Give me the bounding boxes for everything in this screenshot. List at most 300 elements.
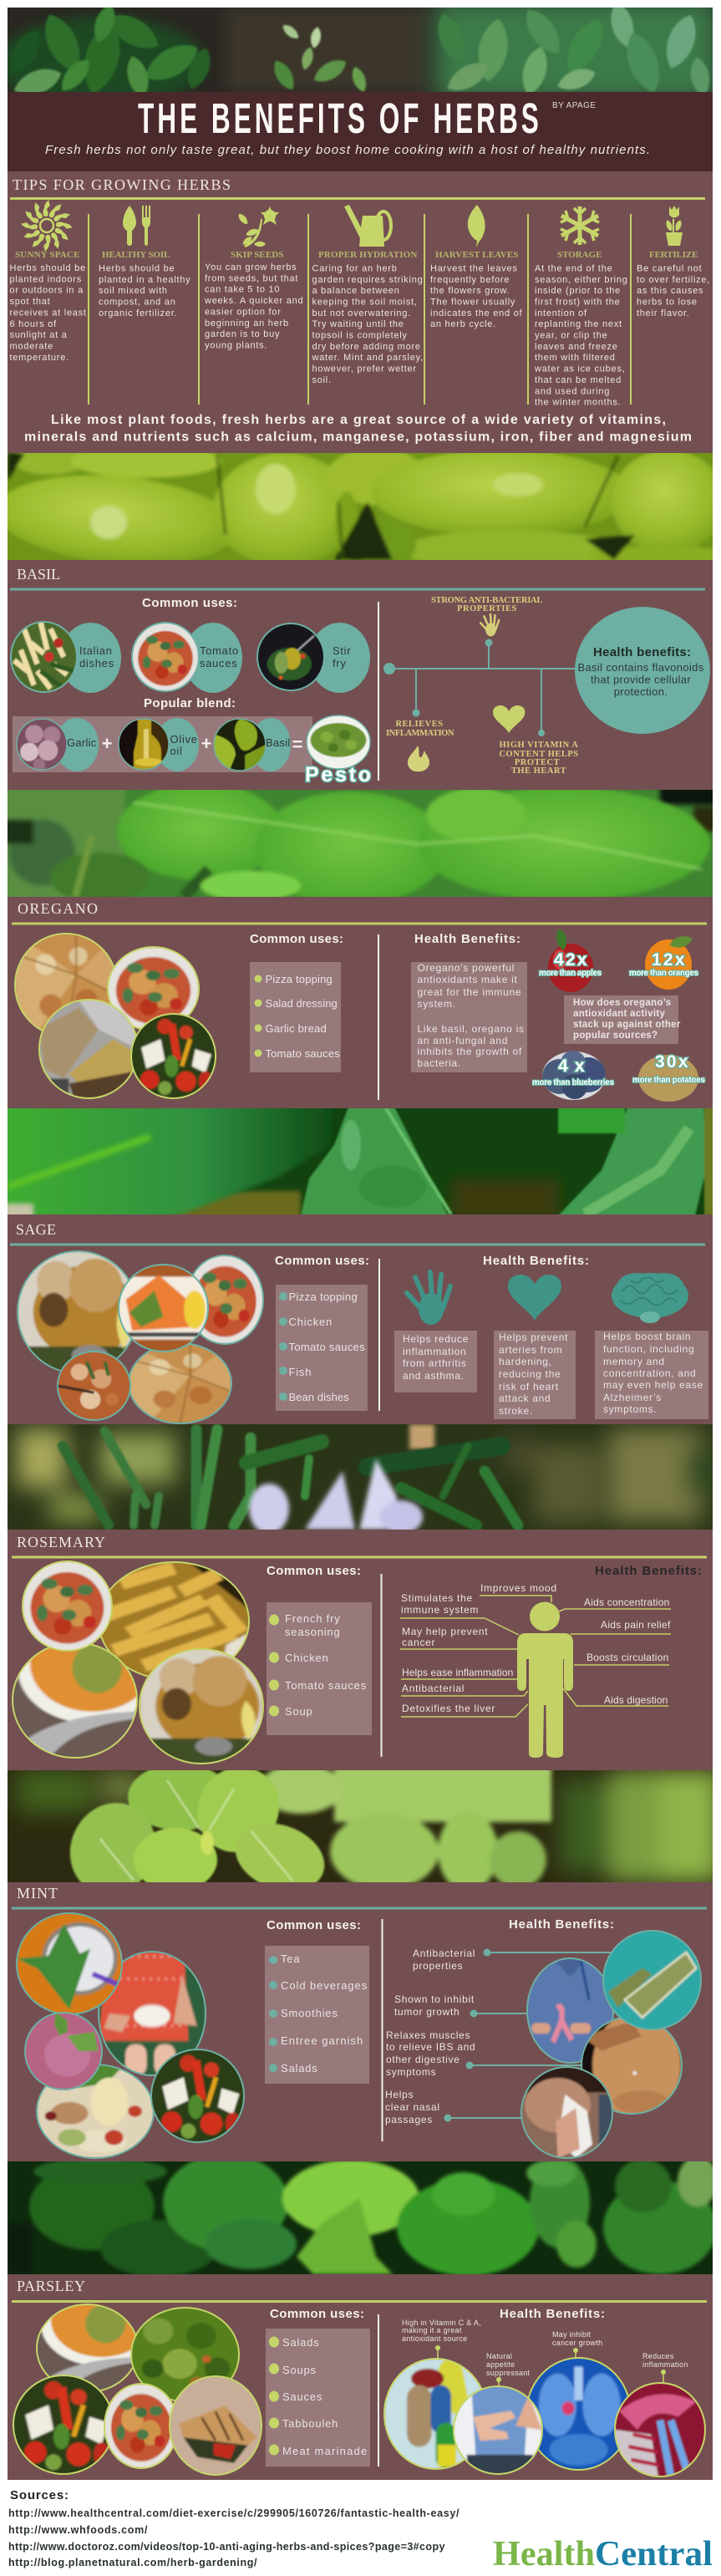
common uses list: Fish (289, 1366, 312, 1378)
benefits text box: bacteria. (418, 1057, 461, 1069)
benefit: arteries (494, 1275, 576, 1419)
icon: sun (21, 200, 73, 252)
photo: roast chicken (18, 1251, 138, 1373)
stat: apples (539, 928, 602, 992)
logo: HealthCentral: Central (595, 2535, 713, 2573)
tip 3: skip seeds: can take 5 to 10 (205, 285, 280, 295)
common uses list: Tea (281, 1952, 300, 1965)
photo: sneezing (521, 2067, 612, 2158)
benefit: arteries: attack and (499, 1392, 551, 1404)
photo: tomato dish (186, 1255, 263, 1344)
stat: apples: 42x (554, 950, 587, 970)
diagram: human body benefits: Boosts circulation (586, 1652, 669, 1663)
common uses list (276, 1285, 368, 1411)
benefit: brain: function, including (603, 1343, 694, 1355)
heading: basil: BASIL (17, 566, 61, 583)
benefit labels: High in Vitamin C & A, (402, 2319, 481, 2327)
callout: health benefits: that provide cellular (591, 674, 691, 685)
tip 6: storage: season, either bring (535, 275, 628, 285)
tip 4: proper hydration: keeping the soil moist, (312, 297, 418, 307)
tip 4: proper hydration: Caring for an herb (312, 263, 398, 273)
callout: health benefits: Basil contains flavonoids (577, 661, 704, 674)
stat: potatoes: 30x (655, 1052, 688, 1072)
benefit: brain: symptoms. (603, 1403, 657, 1415)
benefit labels: Relaxes muscles (386, 2029, 470, 2041)
benefits text box: Oregano’s powerful (418, 962, 515, 974)
subtitle: Fresh herbs not only taste great, but they boost home cooking with a host of healthy nutrients. (45, 143, 650, 157)
photo: roast chicken (140, 1649, 263, 1764)
photo: vitamin pills (384, 2356, 487, 2469)
heading: sage: SAGE (16, 1221, 57, 1238)
food photo collage (17, 1913, 244, 2158)
tip 7: fertilize: to over fertilize, (637, 275, 710, 285)
common uses list: Tomato sauces (289, 1341, 366, 1353)
tip 4: proper hydration: a balance between (312, 286, 400, 296)
tip 5: harvest leaves: Harvest the leaves (430, 263, 518, 273)
common uses list: Tomato sauces (266, 1047, 341, 1060)
photo: soup (37, 2282, 158, 2392)
benefit: arteries: Helps prevent (499, 1331, 568, 1343)
benefit labels: Antibacterial (413, 1947, 475, 1959)
blend: olive oil (119, 718, 199, 771)
health benefits heading: Health Benefits: (509, 1917, 615, 1932)
icon: person (517, 1601, 573, 1758)
benefit labels: tumor growth (394, 2006, 460, 2018)
heading: mint: MINT (17, 1885, 58, 1901)
benefits text box: great for the immune (418, 986, 521, 998)
blend: garlic: Garlic (67, 736, 97, 749)
tip 1: sunny space: temperature. (10, 353, 69, 363)
logo: HealthCentral: Health (493, 2535, 595, 2573)
common uses list: Pizza topping (289, 1291, 358, 1303)
health benefits heading: Health Benefits: (500, 2307, 606, 2321)
panel: sage (8, 1214, 713, 1424)
tip 3: skip seeds: SKIP SEEDS (231, 250, 284, 260)
parsley photo (8, 2161, 713, 2274)
use: tomato sauces (132, 623, 242, 693)
sources: http://blog.planetnatural.com/herb-gardening/ (8, 2557, 257, 2568)
tip 2: healthy soil: planted in a healthy (99, 275, 190, 285)
panel: rosemary (8, 1530, 713, 1770)
blend: olive oil: Olive (170, 733, 198, 746)
common uses heading: Common uses: (142, 596, 238, 610)
pesto blend strip (13, 716, 312, 772)
heading: parsley: PARSLEY (17, 2278, 86, 2294)
sources: Sources: (10, 2488, 69, 2502)
photo: garlic bread (39, 1000, 138, 1098)
common uses list: Entree garnish (281, 2034, 363, 2047)
use: Italian dishes: dishes (79, 657, 114, 669)
callout: inflammation: RELIEVES (395, 720, 444, 729)
blend: olive oil: oil (170, 745, 183, 757)
icon: trowel and fork (123, 206, 150, 246)
benefit labels: Helps (385, 2089, 414, 2100)
callout: anti-bacterial: PROPERTIES (457, 604, 517, 613)
header band (8, 92, 713, 171)
photo: soup (13, 1612, 162, 1758)
panel: tips for growing herbs (8, 171, 713, 453)
photo: tomato dish (23, 1561, 112, 1651)
benefit: arteries: hardening, (499, 1356, 552, 1367)
question box: How does oregano’s (573, 998, 671, 1008)
use: stir fry: Stir (333, 644, 351, 657)
common uses list: Chicken (289, 1316, 333, 1328)
byline: BY APAGE (552, 101, 596, 110)
tip 6: storage: that can be melted (535, 375, 622, 385)
photo collage: benefits (384, 2356, 705, 2477)
tip 4: proper hydration: water. Mint and parsley, (311, 353, 424, 363)
benefits text box: antioxidants make it (418, 974, 518, 985)
benefit labels: appetite (486, 2360, 515, 2369)
callout: inflammation: INFLAMMATION (386, 729, 454, 738)
benefit: arteries: stroke. (499, 1405, 533, 1417)
icon: watering can (344, 205, 391, 247)
blend: basil (214, 718, 291, 771)
common uses list: Tabbouleh (282, 2417, 338, 2430)
stat: potatoes: more than potatoes (632, 1076, 705, 1085)
callout: heart: HIGH VITAMIN A (500, 741, 578, 750)
photo: pizza (15, 934, 117, 1036)
icon: potted flower (665, 206, 683, 246)
food photo collage (18, 1251, 263, 1423)
tip 7: fertilize: as this causes (637, 286, 703, 296)
stat: oranges: more than oranges (629, 969, 698, 978)
tip 4: proper hydration: but not overwatering. (312, 308, 411, 318)
sage leaf photo (8, 1108, 713, 1214)
tip 4: proper hydration: however, prefer wetter (312, 364, 417, 374)
photo: shoulder anatomy (615, 2383, 705, 2477)
common uses heading: Common uses: (270, 2307, 365, 2321)
tree diagram lines (383, 639, 575, 736)
tip 4: proper hydration: garden requires striking (312, 275, 423, 285)
benefit labels: Natural (486, 2352, 512, 2360)
callout: health benefits: Health benefits: (593, 645, 691, 659)
tip 3: skip seeds: beginning an herb (205, 318, 289, 328)
tip 5: harvest leaves: The flower usually (430, 297, 515, 307)
callout: heart: PROTECT (515, 758, 560, 767)
health benefits heading: Health Benefits: (595, 1564, 702, 1578)
common uses list: Smoothies (281, 2007, 338, 2019)
callout: anti-bacterial: STRONG ANTI-BACTERIAL (431, 596, 543, 605)
tip 7: fertilize (637, 250, 710, 318)
photo collage: health conditions (521, 1931, 701, 2158)
tip 5: harvest leaves: the flowers grow. (430, 286, 510, 296)
oregano leaf photo (8, 790, 713, 897)
connector lines (444, 1949, 611, 2121)
health benefits heading: Health Benefits: (483, 1254, 590, 1268)
benefit labels: cancer growth (552, 2339, 602, 2347)
benefit labels: antioxidant source (402, 2334, 467, 2343)
benefit: inflammation (394, 1272, 477, 1392)
tip 4: proper hydration (311, 250, 424, 385)
common uses list: Cold beverages (281, 1979, 368, 1992)
callout: health benefits (575, 607, 710, 734)
connector dots (435, 2345, 666, 2388)
photo: tomato dish (104, 2384, 178, 2468)
benefit: inflammation: inflammation (403, 1346, 466, 1357)
photo: nurse with ribbon (527, 1958, 613, 2063)
popular blend heading: Popular blend: (144, 696, 236, 710)
tip 4: proper hydration: Try waiting until the (312, 319, 404, 329)
callout: heart (493, 705, 579, 776)
common uses heading: Common uses: (250, 932, 344, 946)
icon: leaf (468, 205, 485, 247)
diagram: human body benefits: Improves mood (480, 1582, 557, 1594)
benefit: inflammation: and asthma. (403, 1370, 465, 1382)
plus: + (102, 733, 112, 754)
photo: vegetable salad (151, 2049, 244, 2142)
panel: parsley (8, 2274, 713, 2480)
benefit: inflammation: Helps reduce (403, 1333, 469, 1345)
diagram: human body benefits: Stimulates the (401, 1592, 473, 1604)
nutrient statement: Like most plant foods, fresh herbs are a great source of a wide variety of vitamins, (51, 413, 666, 427)
photo: tabbouleh (131, 2308, 239, 2401)
tip 1: sunny space (10, 250, 87, 363)
photo: stomach (454, 2386, 542, 2474)
benefit: arteries: arteries from (499, 1344, 562, 1356)
pesto result (305, 715, 371, 787)
tip 3: skip seeds: young plants. (205, 340, 267, 350)
benefit: brain: Helps boost brain (603, 1331, 691, 1342)
tip 6: storage: water as ice cubes, (534, 364, 625, 374)
blend: garlic (17, 718, 99, 771)
photo: french fries (99, 1562, 249, 1680)
photo: pizza (129, 1343, 231, 1423)
benefit labels: other digestive (386, 2054, 460, 2065)
benefit labels (385, 1947, 475, 2125)
health benefits heading: Health Benefits: (414, 932, 521, 946)
common uses list: Meat marinade (282, 2445, 368, 2457)
common uses list: Salad dressing (266, 997, 338, 1010)
tip 3: skip seeds: from seeds, but that (205, 273, 298, 283)
diagram: human body benefits: Aids pain relief (601, 1619, 671, 1631)
common uses list (250, 962, 341, 1072)
callout: anti-bacterial (431, 596, 543, 636)
stat: blueberries: more than blueberries (532, 1078, 614, 1087)
common uses heading: Common uses: (267, 1918, 362, 1932)
tip 6: storage: At the end of the (535, 263, 612, 273)
common uses list: Soups (282, 2364, 317, 2376)
benefit labels: symptoms (386, 2066, 436, 2078)
common uses heading: Common uses: (267, 1564, 362, 1578)
common uses list: Salads (281, 2062, 318, 2075)
tip 1: sunny space: spot that (10, 297, 50, 307)
callout: health benefits: protection. (614, 685, 668, 698)
benefits text box (411, 962, 527, 1072)
tip 5: harvest leaves (430, 250, 523, 329)
photo: lungs (526, 2358, 631, 2470)
common uses list: Sauces (282, 2390, 322, 2403)
common uses list: Pizza topping (266, 973, 333, 985)
photo: woman with tea (99, 1952, 206, 2075)
logo: HealthCentral (493, 2535, 713, 2573)
benefits text box: Like basil, oregano is (418, 1023, 525, 1035)
diagram: human body benefits: cancer (402, 1637, 435, 1648)
tip 6: storage (534, 250, 628, 408)
photo: salad (13, 2375, 114, 2474)
panel: mint (8, 1882, 713, 2161)
tip 2: healthy soil: soil mixed with (99, 286, 168, 296)
common uses list: Garlic bread (266, 1022, 327, 1035)
photo: berry smoothie (25, 2013, 102, 2090)
tip 3: skip seeds: You can grow herbs (205, 262, 297, 272)
tip 6: storage: year, or clip the (535, 331, 607, 341)
diagram: human body benefits: Helps ease inflammation (402, 1667, 514, 1678)
tip 5: harvest leaves: an herb cycle. (430, 319, 496, 329)
tip 7: fertilize: FERTILIZE (649, 250, 698, 260)
benefit labels: inflammation (642, 2360, 688, 2369)
common uses list: Salads (282, 2336, 320, 2349)
benefit labels: May inhibit (552, 2330, 592, 2339)
tip 2: healthy soil (99, 250, 190, 318)
photo: mint drink (17, 1913, 122, 2014)
photo: tomato dish (108, 947, 199, 1031)
title: THE BENEFITS OF HERBS (138, 94, 539, 142)
common uses list (266, 2329, 370, 2467)
tip 4: proper hydration: soil. (312, 375, 332, 385)
hero photo: potted herbs (8, 8, 713, 92)
benefit labels: clear nasal (385, 2101, 440, 2113)
tip 5: harvest leaves: indicates the end of (430, 308, 523, 318)
tip 4: proper hydration: dry before adding more (312, 342, 421, 352)
common uses list: seasoning (285, 1626, 340, 1638)
benefits text box: inhibits the growth of (418, 1046, 522, 1057)
common uses list: Bean dishes (289, 1391, 349, 1403)
callout: heart: CONTENT HELPS (499, 750, 579, 759)
photo: bacteria (603, 1931, 701, 2029)
photo: salad (131, 1014, 216, 1098)
tip 3: skip seeds (204, 250, 303, 350)
benefit labels: Shown to inhibit (394, 1993, 475, 2005)
photo: salmon (119, 1265, 208, 1352)
diagram: human body benefits (400, 1582, 671, 1758)
blend: basil: Basil (266, 736, 291, 749)
tip 3: skip seeds: weeks. A quicker and (204, 296, 303, 306)
common uses list: Chicken (285, 1652, 329, 1664)
pesto result: Pesto (305, 763, 371, 787)
sources: http://www.doctoroz.com/videos/top-10-anti-aging-herbs-and-spices?page=3#copy (8, 2541, 445, 2553)
question box: antioxidant activity (573, 1009, 665, 1019)
photo: belly (581, 2012, 682, 2119)
tip 2: healthy soil: compost, and an (99, 297, 176, 307)
use: tomato sauces: Tomato (200, 644, 239, 657)
stat: apples: more than apples (539, 969, 602, 978)
tip 1: sunny space: Herbs should be (10, 263, 86, 273)
tip 6: storage: STORAGE (557, 250, 602, 260)
icon: snowflake (561, 206, 599, 245)
basil leaf photo (8, 453, 713, 560)
common uses list: French fry (285, 1612, 341, 1625)
tip 1: sunny space: SUNNY SPACE (15, 250, 80, 260)
photo: grilled salmon (170, 2376, 261, 2475)
use: stir fry: fry (333, 657, 347, 669)
benefit labels (402, 2319, 688, 2377)
diagram: human body benefits: Aids digestion (604, 1694, 668, 1706)
use: Italian dishes: Italian (79, 644, 113, 657)
heading: oregano: OREGANO (18, 900, 99, 917)
diagram: human body benefits: immune system (401, 1604, 479, 1616)
tip 6: storage: first frost) with the (535, 297, 621, 307)
benefit: brain: memory and (603, 1356, 665, 1367)
diagram: human body benefits: May help prevent (402, 1626, 488, 1637)
use: stir fry (257, 623, 370, 693)
stat: blueberries: 4x (558, 1056, 585, 1076)
benefit labels: suppressant (486, 2369, 531, 2377)
benefit: arteries: risk of heart (499, 1381, 559, 1392)
common uses list (267, 1602, 372, 1735)
common uses heading: Common uses: (275, 1254, 370, 1268)
nutrient statement (24, 413, 692, 445)
benefit labels: to relieve IBS and (386, 2041, 475, 2053)
photo: entree salad (37, 2064, 154, 2158)
tip 7: fertilize: their flavor. (637, 308, 690, 318)
benefits text box: an anti-fungal and (418, 1035, 508, 1046)
tip 3: skip seeds: garden is to buy (205, 329, 280, 339)
panel: oregano (8, 897, 713, 1108)
tip 1: sunny space: moderate (10, 341, 53, 351)
tip 4: proper hydration: PROPER HYDRATION (318, 250, 418, 260)
stat: potatoes (632, 1052, 705, 1102)
food photo collage (13, 2282, 261, 2475)
tip 3: skip seeds: easier option for (205, 307, 282, 317)
question box: stack up against other (573, 1020, 681, 1030)
icon: sprig with flower (236, 206, 279, 247)
tip 2: healthy soil: organic fertilizer. (99, 308, 177, 318)
tip 5: harvest leaves: frequently before (430, 275, 510, 285)
tip 1: sunny space: planted indoors (10, 274, 82, 284)
callout: inflammation (386, 720, 454, 771)
stat: oranges (629, 934, 698, 990)
tip 4: proper hydration: topsoil is completely (312, 331, 408, 341)
mint photo (8, 1770, 713, 1882)
benefit: brain: Alzheimer’s (603, 1392, 662, 1403)
benefit: brain (595, 1273, 708, 1419)
heading: tips: TIPS FOR GROWING HERBS (13, 176, 231, 193)
food photo collage (13, 1561, 263, 1764)
callout: heart: THE HEART (511, 766, 566, 776)
diagram: human body benefits: Aids concentration (584, 1596, 670, 1608)
tip 6: storage: leaves and freeze (535, 342, 618, 352)
benefit: inflammation: from arthritis (403, 1357, 466, 1369)
common uses list: Tomato sauces (285, 1679, 367, 1692)
benefit: brain: may even help ease (603, 1379, 703, 1391)
tip 2: healthy soil: Herbs should be (99, 263, 175, 273)
tip 1: sunny space: sunlight at a (10, 330, 68, 340)
tip 2: healthy soil: HEALTHY SOIL (102, 250, 170, 260)
tip 1: sunny space: or outdoors in a (10, 286, 84, 296)
stat: blueberries (532, 1051, 614, 1100)
benefits text box: system. (418, 998, 456, 1010)
use: Italian dishes (11, 622, 121, 693)
tip 5: harvest leaves: HARVEST LEAVES (435, 250, 519, 260)
rosemary photo (8, 1424, 713, 1530)
benefit: arteries: reducing the (499, 1368, 561, 1380)
tip 7: fertilize: Be careful not (637, 263, 702, 273)
diagram: human body benefits: Detoxifies the liver (402, 1703, 495, 1714)
equals: = (292, 734, 302, 755)
photo: bean soup (58, 1352, 130, 1420)
tip 6: storage: the winter months. (535, 398, 621, 408)
sources: http://www.whfoods.com/ (8, 2524, 148, 2536)
question box (564, 995, 681, 1044)
tip 6: storage: and used during (535, 386, 610, 396)
sources: http://www.healthcentral.com/diet-exercise/c/299905/160726/fantastic-health-easy/ (8, 2507, 460, 2519)
stat: oranges: 12x (652, 950, 685, 970)
tip 6: storage: replanting the next (535, 319, 622, 329)
tip 6: storage: inside (prior to the (535, 286, 621, 296)
heading: rosemary: ROSEMARY (17, 1534, 106, 1550)
sources (8, 2488, 460, 2568)
